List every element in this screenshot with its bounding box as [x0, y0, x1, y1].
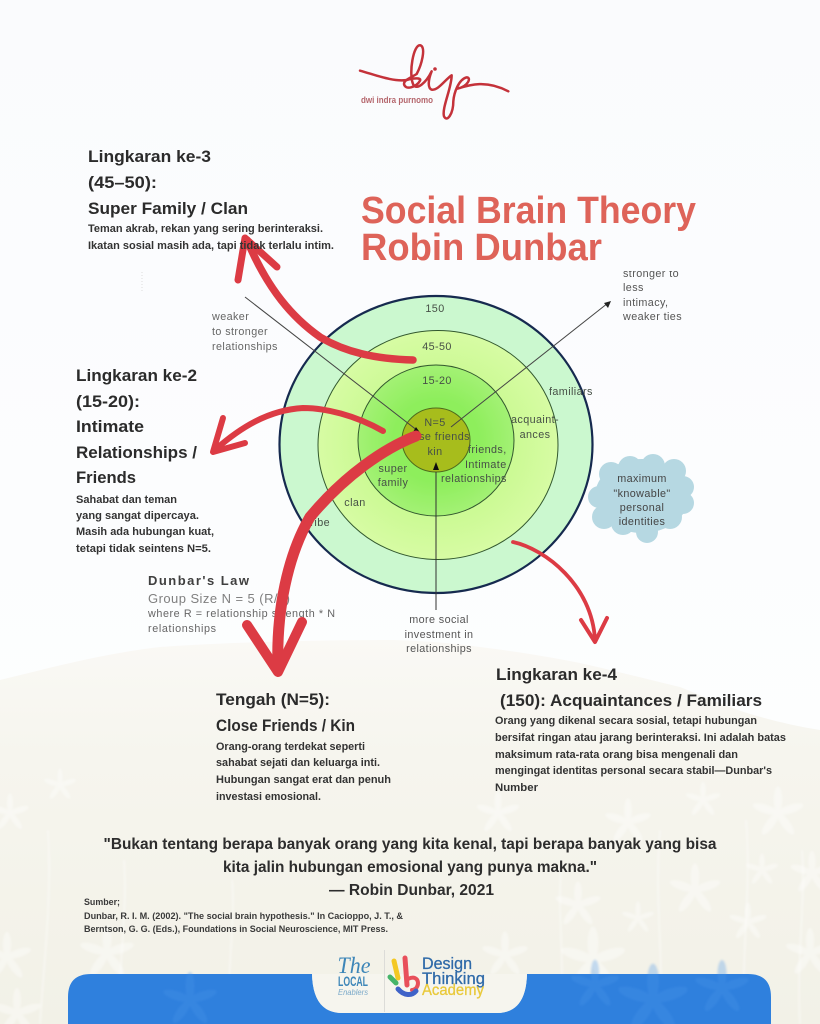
description: Lingkaran ke-4: Number: [495, 782, 539, 794]
heading: Lingkaran ke-4: Lingkaran ke-4: [496, 665, 618, 684]
description: Tengah: sahabat sejati dan keluarga inti.: [216, 757, 380, 769]
ring: 45-50: [318, 330, 558, 560]
label: stronger to less: weaker ties: [622, 311, 682, 323]
title: Robin Dunbar: [361, 227, 602, 269]
circle labels: N=5: [424, 417, 446, 429]
circle labels: 150: [425, 303, 445, 315]
heading: Lingkaran ke-3: [88, 147, 248, 218]
heading: Lingkaran ke-4: (150): Acquaintances / Familiars: [500, 691, 762, 710]
source citation: [84, 896, 403, 934]
circle labels: friends,: [468, 444, 507, 456]
ring: 150: [280, 296, 592, 593]
label: stronger to less: stronger to: [623, 268, 679, 280]
circle labels: acquaint-: [511, 414, 559, 426]
label: weaker to stronger: relationships: [212, 341, 278, 353]
cloud: maximum knowable identities: maximum: [617, 473, 667, 485]
cloud: maximum knowable identities: "knowable": [613, 488, 671, 500]
description: Tengah: investasi emosional.: [216, 791, 321, 803]
logo: dwi indra purnomo signature: [360, 45, 508, 118]
description: Tengah: [216, 741, 391, 803]
description: Lingkaran ke-4: maksimum rata-rata orang bisa mengenali dan: [495, 749, 738, 761]
circle labels: super: [378, 463, 408, 475]
text block: Lingkaran ke-4: [495, 665, 786, 794]
logo: Design Thinking Academy: Academy: [422, 982, 484, 999]
quote: "Bukan tentang berapa banyak orang yang kita kenal, tapi berapa banyak yang bisa: [104, 836, 717, 853]
circle labels: clan: [344, 497, 366, 509]
heading: Lingkaran ke-3: (45–50):: [88, 173, 157, 192]
logo: Design Thinking Academy: Thinking: [422, 969, 485, 988]
heading: Lingkaran ke-2: Lingkaran ke-2: [76, 366, 197, 385]
description: Tengah: Orang-orang terdekat seperti: [216, 741, 365, 753]
text: Dunbar's Law: where R = relationship strength * N: [147, 608, 335, 620]
title: [361, 190, 696, 269]
ring: 15-20: [358, 365, 514, 516]
logo: Design Thinking Academy: Design: [422, 954, 472, 973]
circle labels: kin: [427, 446, 443, 458]
line: more social investment arrow: [433, 462, 439, 610]
description: Lingkaran ke-2: yang sangat dipercaya.: [76, 510, 199, 522]
text: Dunbar's Law: Dunbar's Law: [148, 573, 250, 588]
circle labels: relationships: [441, 473, 507, 485]
description: Lingkaran ke-3: Ikatan sosial masih ada, tapi tidak terlalu intim.: [88, 240, 334, 252]
chart: Dunbar concentric circles: [211, 268, 694, 655]
line: stronger to less arrow: [451, 301, 611, 427]
arrow: to ring 2: [213, 408, 383, 452]
circle labels: 45-50: [422, 341, 452, 353]
text: Dunbar's Law: Group Size N = 5 (R/3): [148, 591, 290, 606]
text: Dunbar's Law: [147, 573, 335, 635]
title: Social Brain Theory: [361, 190, 696, 232]
cloud: maximum knowable identities: identities: [619, 516, 666, 528]
circle labels: ances: [520, 429, 551, 441]
logo: Design Thinking Academy: [390, 954, 485, 999]
description: Lingkaran ke-2: tetapi tidak seintens N=5.: [76, 543, 211, 555]
circle labels: Intimate: [465, 459, 507, 471]
text block: Tengah N=5: [216, 690, 391, 803]
heading: Tengah: [216, 690, 355, 735]
text block: Lingkaran ke-2: [76, 366, 214, 555]
label: weaker to stronger: weaker: [211, 311, 249, 323]
circle labels: [307, 303, 593, 529]
circle labels: 15-20: [422, 375, 452, 387]
label: weaker to stronger: [211, 311, 278, 353]
cloud: maximum knowable identities: personal: [620, 502, 664, 514]
heading: Lingkaran ke-2: Relationships /: [76, 443, 197, 462]
label: more social investment: investment in: [405, 629, 473, 641]
circle labels: tribe: [307, 517, 330, 529]
source citation: Berntson, G. G. (Eds.), Foundations in Social Neuroscience, MIT Press.: [84, 923, 388, 934]
ring: core N=5: [402, 408, 470, 472]
description: Lingkaran ke-2: [76, 494, 214, 555]
arrow: to ring 3: [238, 238, 413, 360]
description: Lingkaran ke-4: mengingat identitas personal secara stabil—Dunbar's: [495, 765, 772, 777]
heading: Lingkaran ke-2: Intimate: [76, 417, 144, 436]
heading: Lingkaran ke-2: (15-20):: [76, 392, 140, 411]
logo: The Local Enablers: LOCAL: [338, 973, 368, 989]
label: more social investment: relationships: [406, 643, 472, 655]
description: Lingkaran ke-3: Teman akrab, rekan yang sering berinteraksi.: [88, 223, 323, 235]
heading: Lingkaran ke-2: [76, 366, 197, 487]
quote: [104, 836, 717, 899]
description: Lingkaran ke-4: [495, 715, 786, 794]
description: Lingkaran ke-3: [88, 223, 334, 252]
source citation: Sumber;: [84, 896, 120, 907]
description: Lingkaran ke-2: Masih ada hubungan kuat,: [76, 526, 214, 538]
quote: — Robin Dunbar, 2021: [329, 882, 494, 899]
heading: Tengah: Close Friends / Kin: [216, 716, 355, 735]
description: Lingkaran ke-4: Orang yang dikenal secara sosial, tetapi hubungan: [495, 715, 757, 727]
text block: Lingkaran ke-3: [88, 147, 334, 252]
heading: Lingkaran ke-2: Friends: [76, 468, 136, 487]
label: weaker to stronger: to stronger: [212, 326, 268, 338]
label: stronger to less: intimacy,: [623, 297, 668, 309]
footer: blue bar with logo tab cut-out: [68, 950, 771, 1024]
source citation: Dunbar, R. I. M. (2002). "The social brain hypothesis." In Cacioppo, J. T., &: [84, 910, 403, 921]
heading: Tengah: Tengah (N=5):: [216, 690, 330, 709]
line: weaker to stronger arrow: [245, 297, 421, 434]
label: stronger to less: [623, 271, 682, 320]
logo: The Local Enablers: [338, 953, 370, 997]
label: more social investment: [405, 614, 473, 655]
label: more social investment: more social: [409, 614, 469, 626]
heading: Lingkaran ke-4: [496, 665, 762, 710]
arrow: to center: [247, 436, 416, 672]
heading: Lingkaran ke-3: Lingkaran ke-3: [88, 147, 211, 166]
description: Tengah: Hubungan sangat erat dan penuh: [216, 774, 391, 786]
logo: dwi indra purnomo signature: dwi indra purnomo: [361, 94, 433, 105]
cloud: maximum knowable identities: [588, 454, 694, 543]
quote: kita jalin hubungan emosional yang punya makna.": [223, 859, 597, 876]
description: Lingkaran ke-2: Sahabat dan teman: [76, 494, 177, 506]
icon: colorful hand: [390, 958, 418, 995]
logo: The Local Enablers: The: [338, 953, 370, 978]
description: Lingkaran ke-4: bersifat ringan atau jarang berinteraksi. Ini adalah batas: [495, 732, 786, 744]
logo: The Local Enablers: Enablers: [338, 987, 369, 997]
circle labels: familiars: [549, 386, 593, 398]
label: stronger to less: less: [623, 282, 644, 294]
circle labels: close friends: [404, 431, 470, 443]
text: Dunbar's Law: relationships: [148, 623, 217, 635]
heading: Lingkaran ke-3: Super Family / Clan: [88, 199, 248, 218]
arrow: to ring 4: [513, 542, 607, 642]
circle labels: family: [378, 477, 408, 489]
